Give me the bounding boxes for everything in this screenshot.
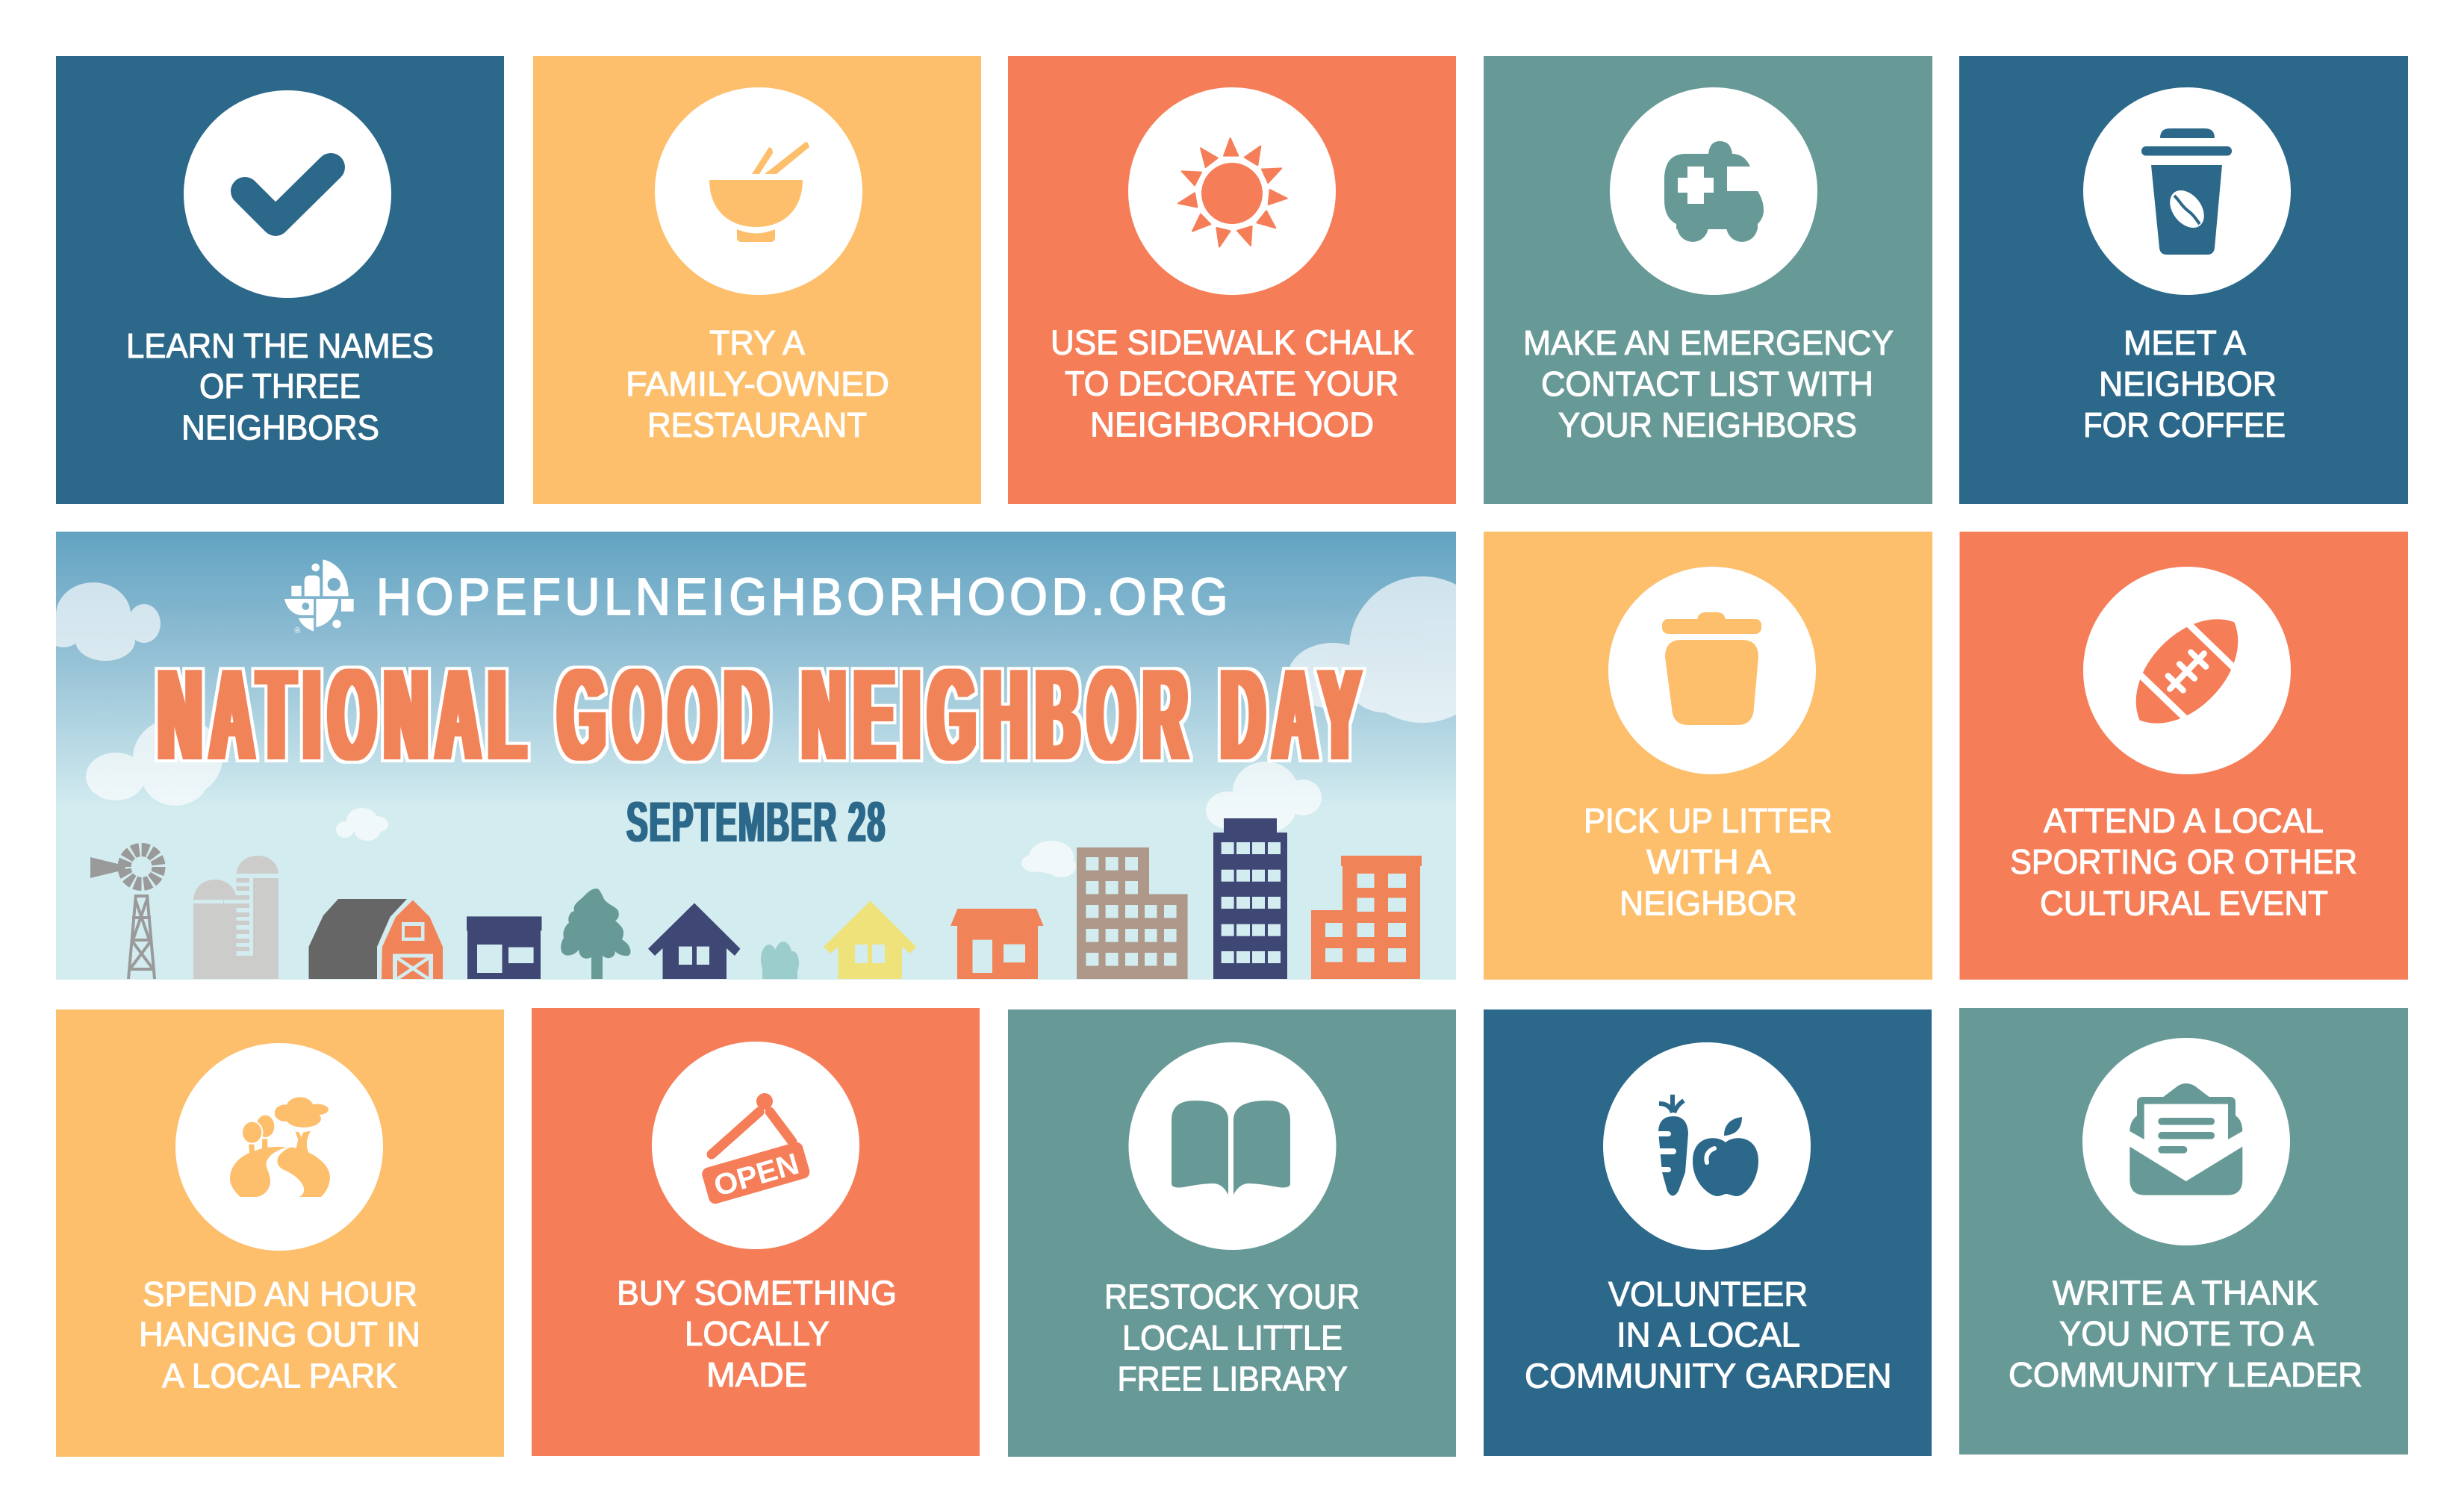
icon: park — [175, 1043, 383, 1251]
icon: sun — [1128, 87, 1336, 295]
card text: WRITE A THANK — [2053, 1274, 2318, 1313]
card text: YOUR NEIGHBORS — [1558, 405, 1857, 444]
icon: carrot and apple — [1603, 1042, 1811, 1250]
card: neighbor coffee — [1959, 56, 2408, 504]
card text: A LOCAL PARK — [162, 1356, 397, 1395]
card text: LOCAL LITTLE — [1122, 1319, 1343, 1357]
card background — [1959, 56, 2408, 504]
card text: FREE LIBRARY — [1117, 1360, 1348, 1399]
icon: open sign: OPEN — [710, 1148, 803, 1203]
card: little free library — [1008, 1009, 1456, 1457]
card text: VOLUNTEER — [1608, 1275, 1808, 1313]
card text: MAKE AN EMERGENCY — [1523, 323, 1894, 362]
card text: YOU NOTE TO A — [2059, 1314, 2314, 1353]
navy shop — [467, 916, 542, 979]
logo: ® — [294, 626, 300, 635]
card text: COMMUNITY GARDEN — [1525, 1356, 1892, 1395]
card background — [1008, 56, 1456, 504]
orange tower — [1311, 856, 1422, 979]
card text — [1104, 1277, 1360, 1399]
barn — [309, 899, 443, 979]
card text — [1584, 801, 1832, 923]
icon: trash can — [1608, 567, 1816, 774]
tan building — [1077, 847, 1188, 979]
card text: NEIGHBORHOOD — [1090, 405, 1374, 444]
orange house — [951, 909, 1044, 979]
card text: FOR COFFEE — [2083, 405, 2286, 444]
clouds — [45, 576, 1496, 877]
icon: football — [2083, 567, 2291, 774]
card background — [1484, 56, 1932, 504]
card text: WITH A — [1646, 842, 1771, 881]
card text — [2083, 323, 2286, 444]
card text: TRY A — [709, 323, 805, 362]
card text — [1051, 323, 1414, 444]
card background — [1484, 1009, 1932, 1456]
windmill — [90, 850, 158, 979]
card text: IN A LOCAL — [1617, 1315, 1800, 1354]
card text — [617, 1274, 897, 1394]
icon: open sign — [652, 1042, 859, 1249]
card background — [1959, 1008, 2408, 1455]
card: buy local — [532, 1008, 980, 1456]
card text: LEARN THE NAMES — [126, 326, 434, 365]
bush — [761, 942, 799, 979]
card text: TO DECORATE YOUR — [1065, 364, 1399, 403]
card background — [56, 1009, 504, 1457]
card: local park — [56, 1009, 504, 1457]
card text: OF THREE — [199, 367, 361, 405]
card text: MADE — [706, 1355, 807, 1394]
card background — [1484, 532, 1932, 980]
card: thank you note — [1959, 1008, 2408, 1455]
card text: COMMUNITY LEADER — [2009, 1355, 2362, 1394]
card: sidewalk chalk — [1008, 56, 1456, 504]
card: emergency list — [1484, 56, 1932, 504]
card text — [2010, 801, 2357, 923]
card text — [1525, 1275, 1892, 1395]
card text — [626, 323, 889, 444]
icon: ambulance — [1610, 87, 1817, 295]
card text: CONTACT LIST WITH — [1541, 364, 1873, 403]
icon: rice bowl — [655, 87, 862, 295]
icon: coffee cup — [2083, 87, 2291, 295]
card background — [532, 1008, 980, 1456]
navy tower — [1213, 818, 1287, 979]
icon: check mark — [184, 90, 391, 298]
card text: LOCALLY — [685, 1314, 830, 1353]
icon: envelope with letter — [2082, 1038, 2290, 1245]
card text: SPORTING OR OTHER — [2010, 842, 2357, 881]
card text — [126, 326, 434, 447]
card: sporting event — [1959, 532, 2408, 980]
pine tree — [561, 889, 631, 979]
card background — [1008, 1009, 1456, 1457]
card text: CULTURAL EVENT — [2040, 884, 2328, 923]
website heading: HOPEFULNEIGHBORHOOD.ORG — [376, 567, 1232, 626]
card text: ATTEND A LOCAL — [2044, 801, 2324, 840]
card text: FAMILY-OWNED — [626, 364, 889, 403]
card text — [139, 1275, 420, 1395]
card text: NEIGHBORS — [181, 408, 379, 447]
card background — [56, 56, 504, 504]
banner: national good neighbor day — [45, 532, 1496, 980]
yellow house — [824, 900, 916, 979]
card: pick up litter — [1484, 532, 1932, 980]
card: community garden — [1484, 1009, 1932, 1456]
card text — [1523, 323, 1894, 444]
card text: NEIGHBOR — [1620, 884, 1797, 923]
card text: BUY SOMETHING — [617, 1274, 897, 1313]
card text: USE SIDEWALK CHALK — [1051, 323, 1414, 361]
card background — [1959, 532, 2408, 980]
date: SEPTEMBER 28 — [626, 791, 886, 854]
card text: SPEND AN HOUR — [143, 1275, 417, 1313]
card text: HANGING OUT IN — [139, 1315, 420, 1354]
card: family restaurant — [533, 56, 981, 504]
card text: RESTAURANT — [647, 405, 867, 444]
card: learn names — [56, 56, 504, 504]
card text — [2009, 1274, 2362, 1394]
sky background — [56, 532, 1456, 980]
card text: RESTOCK YOUR — [1104, 1277, 1360, 1316]
card text: PICK UP LITTER — [1584, 801, 1832, 840]
card text: NEIGHBOR — [2099, 364, 2277, 403]
logo — [284, 559, 354, 635]
silos — [193, 856, 279, 979]
card text: MEET A — [2124, 323, 2246, 362]
icon: book — [1129, 1042, 1337, 1250]
card background — [533, 56, 981, 504]
navy house — [648, 903, 741, 979]
